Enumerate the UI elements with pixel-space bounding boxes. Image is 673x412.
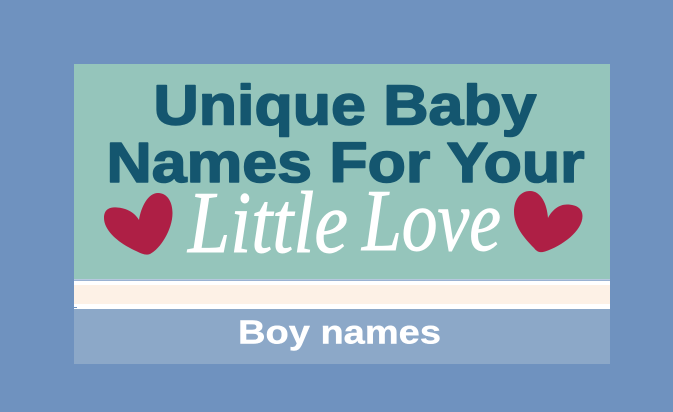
icon: left heart xyxy=(104,193,172,255)
banner heading: Boy names xyxy=(238,314,441,350)
panel: boy names banner xyxy=(74,309,610,364)
icon: right heart xyxy=(514,191,582,252)
panel: title header xyxy=(74,64,610,279)
word: Little: Little xyxy=(186,175,348,272)
divider stripes xyxy=(74,279,610,309)
heading line 1: Unique Baby xyxy=(154,74,537,138)
script subtitle xyxy=(186,173,501,272)
word: Love: Love xyxy=(360,173,501,270)
header background xyxy=(74,64,610,279)
heading line 2: Names For Your xyxy=(106,131,584,195)
